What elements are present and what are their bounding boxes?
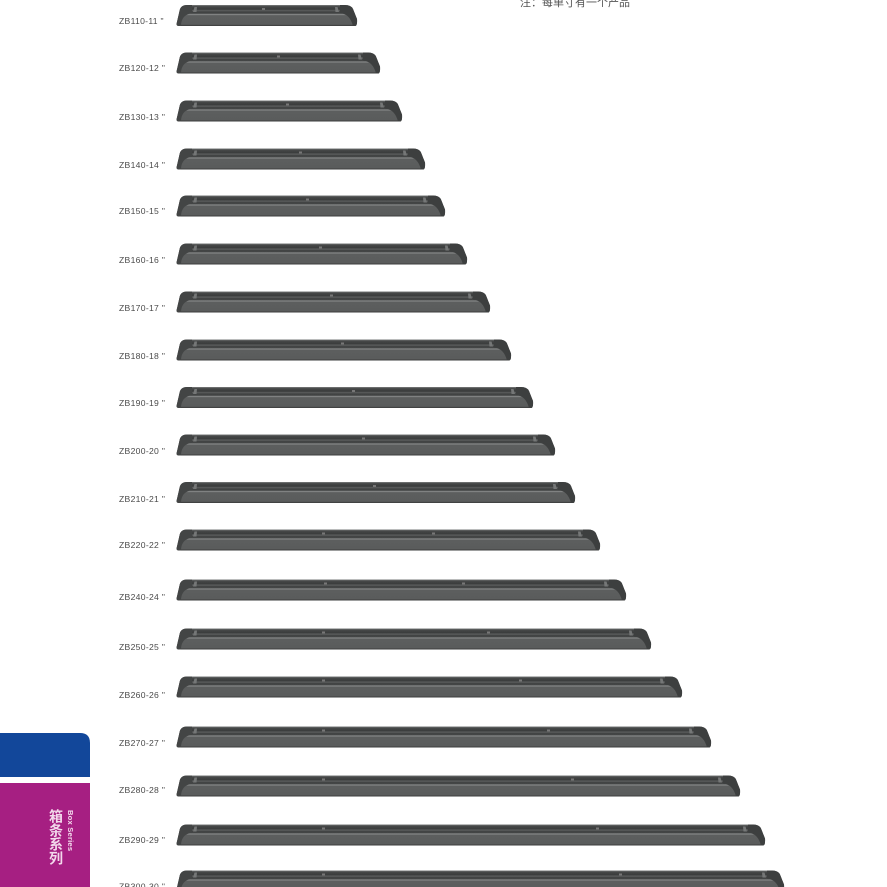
product row: ZB180-18: ZB180-18 " bbox=[119, 351, 165, 361]
product row: ZB220-22: ZB220-22 " bbox=[119, 540, 165, 550]
sidebar title english: Box Series bbox=[66, 810, 75, 851]
product row: ZB240-24 bbox=[119, 580, 626, 602]
product row: ZB240-24: ZB240-24 " bbox=[119, 592, 165, 602]
product row: ZB280-28 bbox=[119, 776, 740, 796]
sidebar blue tab bbox=[0, 733, 90, 777]
product row: ZB250-25 bbox=[119, 628, 651, 652]
product row: ZB210-21 bbox=[119, 482, 575, 504]
product row: ZB260-26: ZB260-26 " bbox=[119, 690, 165, 700]
product row: ZB180-18 bbox=[119, 340, 511, 361]
product row: ZB200-20 bbox=[119, 434, 555, 456]
product row: ZB110-11 bbox=[119, 5, 357, 26]
product row: ZB160-16 bbox=[119, 244, 467, 265]
product row: ZB170-17 bbox=[119, 292, 490, 313]
product row: ZB280-28: ZB280-28 " bbox=[119, 785, 165, 795]
product row: ZB220-22 bbox=[119, 530, 600, 550]
product row: ZB140-14 bbox=[119, 148, 425, 170]
product row: ZB110-11: ZB110-11 " bbox=[119, 16, 164, 26]
sidebar title chinese: 箱条系列 bbox=[46, 809, 66, 865]
product row: ZB130-13 bbox=[119, 100, 402, 122]
product row: ZB150-15: ZB150-15 " bbox=[119, 206, 165, 216]
product row: ZB150-15 bbox=[119, 196, 445, 216]
product row: ZB290-29 bbox=[119, 824, 765, 846]
product row: ZB200-20: ZB200-20 " bbox=[119, 446, 165, 456]
product row: ZB270-27 bbox=[119, 726, 711, 748]
product row: ZB270-27: ZB270-27 " bbox=[119, 738, 165, 748]
product row: ZB250-25: ZB250-25 " bbox=[119, 642, 165, 652]
product row: ZB130-13: ZB130-13 " bbox=[119, 112, 165, 122]
sidebar magenta tab bbox=[0, 783, 90, 887]
product row: ZB300-30 bbox=[119, 870, 784, 887]
product row: ZB210-21: ZB210-21 " bbox=[119, 494, 165, 504]
product row: ZB190-19 bbox=[119, 387, 533, 408]
product row: ZB120-12 bbox=[119, 52, 380, 74]
product row: ZB190-19: ZB190-19 " bbox=[119, 398, 165, 408]
product row: ZB140-14: ZB140-14 " bbox=[119, 160, 165, 170]
product row: ZB160-16: ZB160-16 " bbox=[119, 255, 165, 265]
product row: ZB120-12: ZB120-12 " bbox=[119, 63, 165, 73]
product row: ZB290-29: ZB290-29 " bbox=[119, 835, 165, 845]
product row: ZB170-17: ZB170-17 " bbox=[119, 303, 165, 313]
product row: ZB260-26 bbox=[119, 676, 682, 700]
